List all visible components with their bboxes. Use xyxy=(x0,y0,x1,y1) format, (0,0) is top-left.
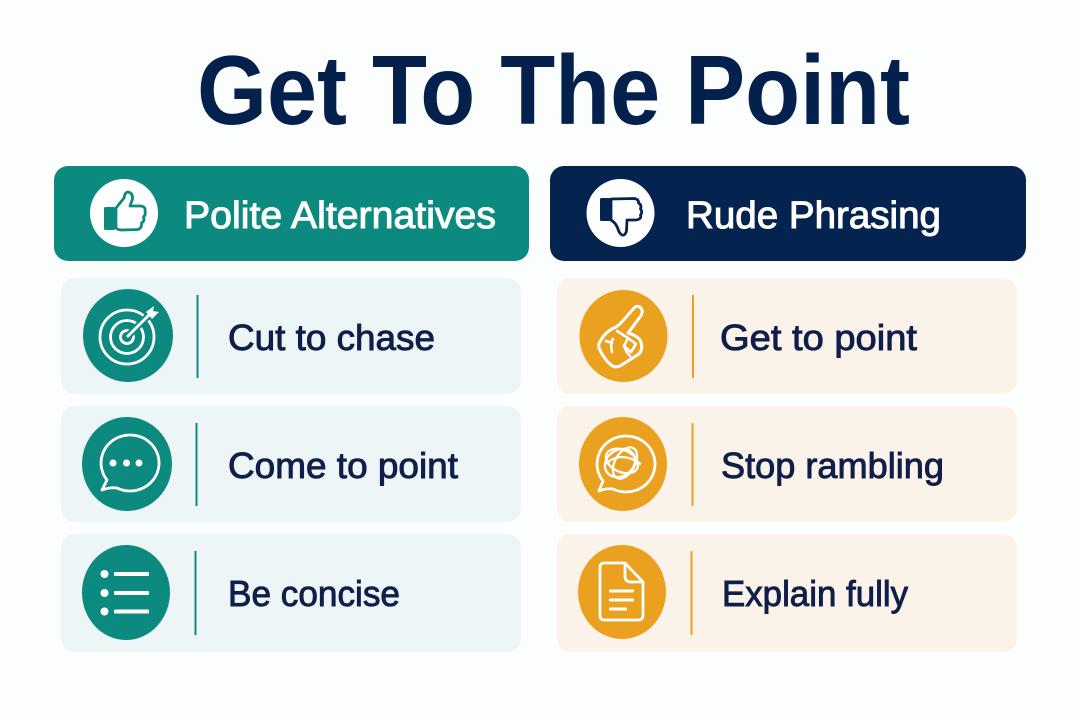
row: come to point: Come to point xyxy=(228,445,458,486)
header: rude phrasing: Rude Phrasing xyxy=(686,195,941,237)
panel: rude phrasing column xyxy=(550,166,1026,652)
header: polite alternatives: Polite Alternatives xyxy=(184,195,496,237)
title: Get To The Point xyxy=(197,35,910,145)
icon: pointing hand xyxy=(580,290,668,382)
icon: list xyxy=(82,545,170,640)
row: stop rambling xyxy=(557,406,1017,522)
icon: thumbs up xyxy=(90,179,158,247)
row: explain fully xyxy=(557,534,1017,652)
row: cut to chase: Cut to chase xyxy=(228,317,435,358)
icon: speech bubble xyxy=(82,417,172,511)
row: stop rambling: Stop rambling xyxy=(721,445,944,486)
row: explain fully: Explain fully xyxy=(722,573,908,614)
row: get to point: Get to point xyxy=(720,317,917,358)
icon: document xyxy=(578,545,666,639)
row: get to point xyxy=(557,278,1017,394)
row: cut to chase xyxy=(61,278,521,394)
header: rude phrasing xyxy=(550,166,1026,261)
icon: tangled speech bubble xyxy=(579,417,667,511)
icon: target with arrow xyxy=(83,289,173,382)
panel: polite alternatives column xyxy=(54,166,529,652)
header: polite alternatives xyxy=(54,166,529,261)
row: be concise xyxy=(61,534,521,652)
row: come to point xyxy=(61,406,521,522)
row: be concise: Be concise xyxy=(228,573,400,614)
icon: thumbs down xyxy=(586,179,654,247)
